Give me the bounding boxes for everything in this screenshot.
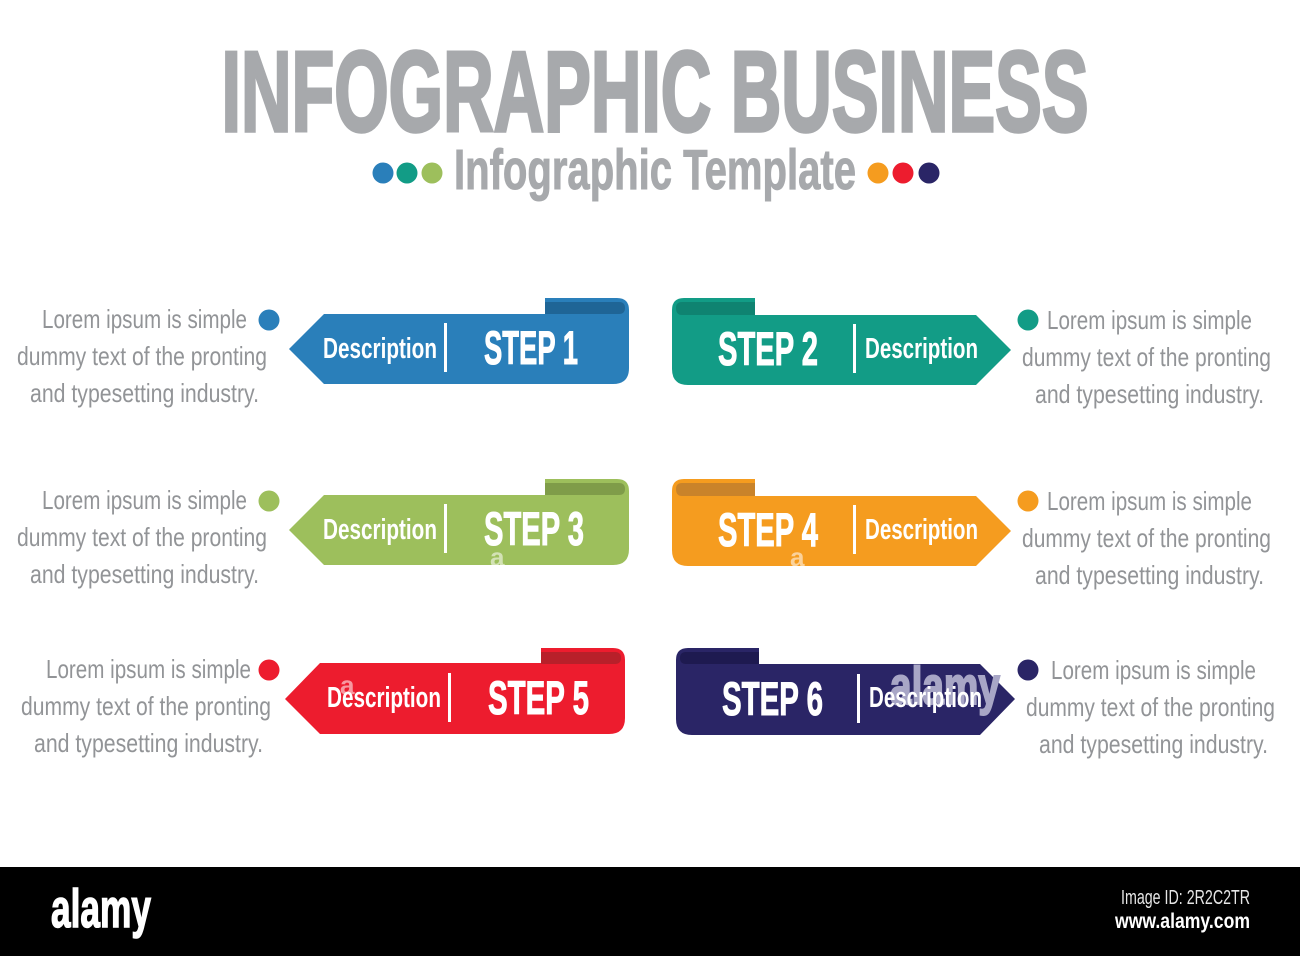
step 5 text: and typesetting industry.: [34, 728, 263, 758]
decorative dots left of subtitle: [372, 162, 442, 184]
step 4 tab stripe: [676, 483, 755, 496]
step 3 text: and typesetting industry.: [30, 559, 259, 589]
image id: Image ID: 2R2C2TR: [1121, 887, 1250, 909]
step 6 tab stripe: [680, 652, 759, 664]
step 2 text: [1022, 305, 1271, 409]
step 3 text: [17, 485, 267, 589]
step 6 label: STEP 6: [722, 672, 823, 725]
step 2 text: Lorem ipsum is simple: [1047, 305, 1252, 335]
step 5 text: Lorem ipsum is simple: [46, 654, 251, 684]
step 4 watermark fragment: a: [790, 542, 805, 572]
step 1 label: STEP 1: [484, 321, 578, 374]
step 6 panel: [676, 648, 1275, 759]
step 4 banner: [672, 479, 1011, 566]
footer logo: alamy: [51, 879, 151, 939]
step 3 label: STEP 3: [484, 502, 584, 555]
step 1 text: dummy text of the pronting: [17, 341, 267, 371]
step 1 text: [17, 304, 267, 408]
step 1 description label: Description: [323, 333, 437, 365]
step 5 text: dummy text of the pronting: [21, 691, 271, 721]
step 4 panel: [672, 479, 1271, 590]
step 2 tab stripe: [676, 302, 755, 315]
step 6 banner: [676, 648, 1015, 735]
step 6 text: [1026, 655, 1275, 759]
step 1 banner: [289, 298, 629, 384]
step 3 description label: Description: [323, 514, 437, 546]
decorative dots right of subtitle: [868, 162, 940, 184]
step 3 panel: [17, 479, 629, 589]
step 2 banner: [672, 298, 1011, 385]
step 3 tab stripe: [545, 483, 625, 495]
step 5 dot: [258, 660, 280, 680]
step 4 text: Lorem ipsum is simple: [1047, 486, 1252, 516]
step 4 description label: Description: [865, 514, 978, 546]
step 2 label: STEP 2: [718, 322, 818, 375]
step 4 text: [1022, 486, 1271, 590]
step 5 label: STEP 5: [488, 671, 589, 724]
step 5 banner: [285, 648, 625, 734]
step 5 watermark fragment: a: [340, 670, 355, 700]
step 4 label: STEP 4: [718, 503, 818, 556]
step 1 panel: [17, 298, 629, 408]
step 4 dot: [1018, 490, 1038, 512]
step 3 dot: [258, 490, 280, 512]
step 3 watermark fragment: a: [490, 542, 505, 572]
step 3 banner: [289, 479, 629, 565]
step 2 panel: [672, 298, 1271, 409]
step 5 panel: [21, 648, 625, 758]
step 5 text: [21, 654, 271, 758]
step 3 text: dummy text of the pronting: [17, 522, 267, 552]
website: www.alamy.com: [1114, 910, 1250, 933]
step 1 dot: [258, 310, 280, 330]
step 6 description label: Description: [869, 682, 982, 714]
step 1 text: Lorem ipsum is simple: [42, 304, 247, 334]
step 1 text: and typesetting industry.: [30, 378, 259, 408]
subtitle: Infographic Template: [454, 138, 856, 202]
step 5 tab stripe: [541, 652, 621, 664]
footer bar: [0, 867, 1300, 956]
watermark on step 6: alamy: [890, 657, 1000, 716]
step 6 dot: [1018, 660, 1038, 680]
step 1 tab stripe: [545, 302, 625, 314]
step 2 dot: [1018, 310, 1038, 330]
step 3 text: Lorem ipsum is simple: [42, 485, 247, 515]
step 2 description label: Description: [865, 333, 978, 365]
step 5 description label: Description: [327, 682, 441, 714]
